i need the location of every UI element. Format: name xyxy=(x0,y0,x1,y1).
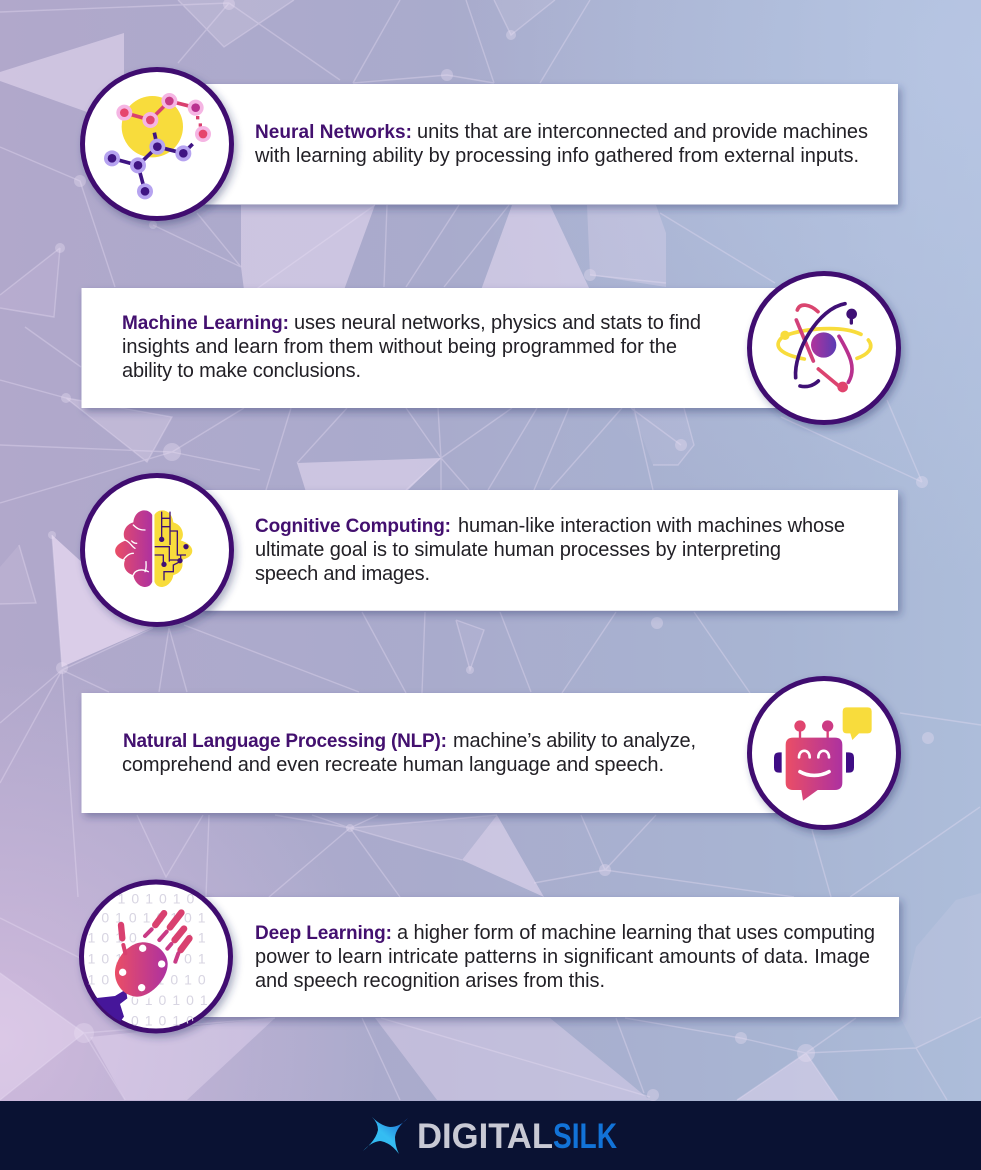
logo: digital silk xyxy=(363,1117,617,1156)
binary digit background: 101010 xyxy=(118,890,200,906)
binary digit background: 01010101 xyxy=(101,909,212,925)
text: machine learning definition xyxy=(122,312,701,382)
icon: chat robot in circle xyxy=(750,678,898,828)
text: machine learning definition: insights and learn from them without being programmed for the xyxy=(122,336,677,358)
binary digit background: 01010 xyxy=(131,1013,200,1029)
text: cognitive computing definition: speech and images. xyxy=(255,563,430,585)
logo icon: four-point star xyxy=(363,1117,408,1154)
card: deep learning xyxy=(200,897,899,1017)
text: deep learning definition: power to learn intricate patterns in significant amounts of data. Image xyxy=(255,946,870,968)
text: NLP definition: machine’s ability to analyze, xyxy=(453,730,696,752)
text: NLP definition: Natural Language Processing (NLP): xyxy=(123,731,447,752)
text: machine learning definition: uses neural networks, physics and stats to find xyxy=(294,312,701,334)
binary digit background: 100101010 xyxy=(88,971,212,987)
binary digit background: 101010101 xyxy=(88,930,212,946)
logo wordmark xyxy=(417,1117,617,1156)
text: deep learning definition: a higher form of machine learning that uses computing xyxy=(397,922,875,944)
logo wordmark: SILK xyxy=(553,1117,617,1156)
logo wordmark: DIGITAL xyxy=(417,1117,553,1156)
binary digit background xyxy=(88,894,207,1026)
card: machine learning xyxy=(82,288,782,408)
text: neural networks definition: with learning ability by processing info gathered from external inputs. xyxy=(254,145,859,167)
text: cognitive computing definition xyxy=(255,515,845,585)
text: neural networks definition: Neural Networks: xyxy=(255,122,412,143)
text: deep learning definition: Deep Learning: xyxy=(255,923,392,944)
text: deep learning definition: and speech recognition arises from this. xyxy=(255,970,605,992)
icon: half brain half circuit in circle xyxy=(82,476,232,624)
text: cognitive computing definition: ultimate goal is to simulate human processes by interpreting xyxy=(255,539,781,561)
text: machine learning definition: Machine Learning: xyxy=(122,313,289,334)
text: NLP definition: comprehend and even recreate human language and speech. xyxy=(122,754,664,776)
binary digit background: 101010101 xyxy=(88,950,212,966)
text: machine learning definition: ability to make conclusions. xyxy=(122,360,361,382)
footer bar xyxy=(0,1101,981,1170)
icon: atom in circle xyxy=(750,274,898,422)
text: neural networks definition xyxy=(254,121,868,167)
text: cognitive computing definition: human-like interaction with machines whose xyxy=(458,515,845,537)
text: NLP definition xyxy=(122,730,696,776)
icon: robot hand over binary digits in circle xyxy=(82,882,230,1031)
binary digit background: 010101 xyxy=(131,992,214,1008)
text: cognitive computing definition: Cognitive Computing: xyxy=(255,516,451,537)
card: neural networks xyxy=(200,84,898,204)
icon: neural network nodes in circle xyxy=(82,70,232,218)
card: cognitive computing xyxy=(200,490,898,611)
card: natural language processing xyxy=(82,693,782,813)
text: deep learning definition xyxy=(255,922,875,992)
text: neural networks definition: units that are interconnected and provide machines xyxy=(417,121,868,143)
